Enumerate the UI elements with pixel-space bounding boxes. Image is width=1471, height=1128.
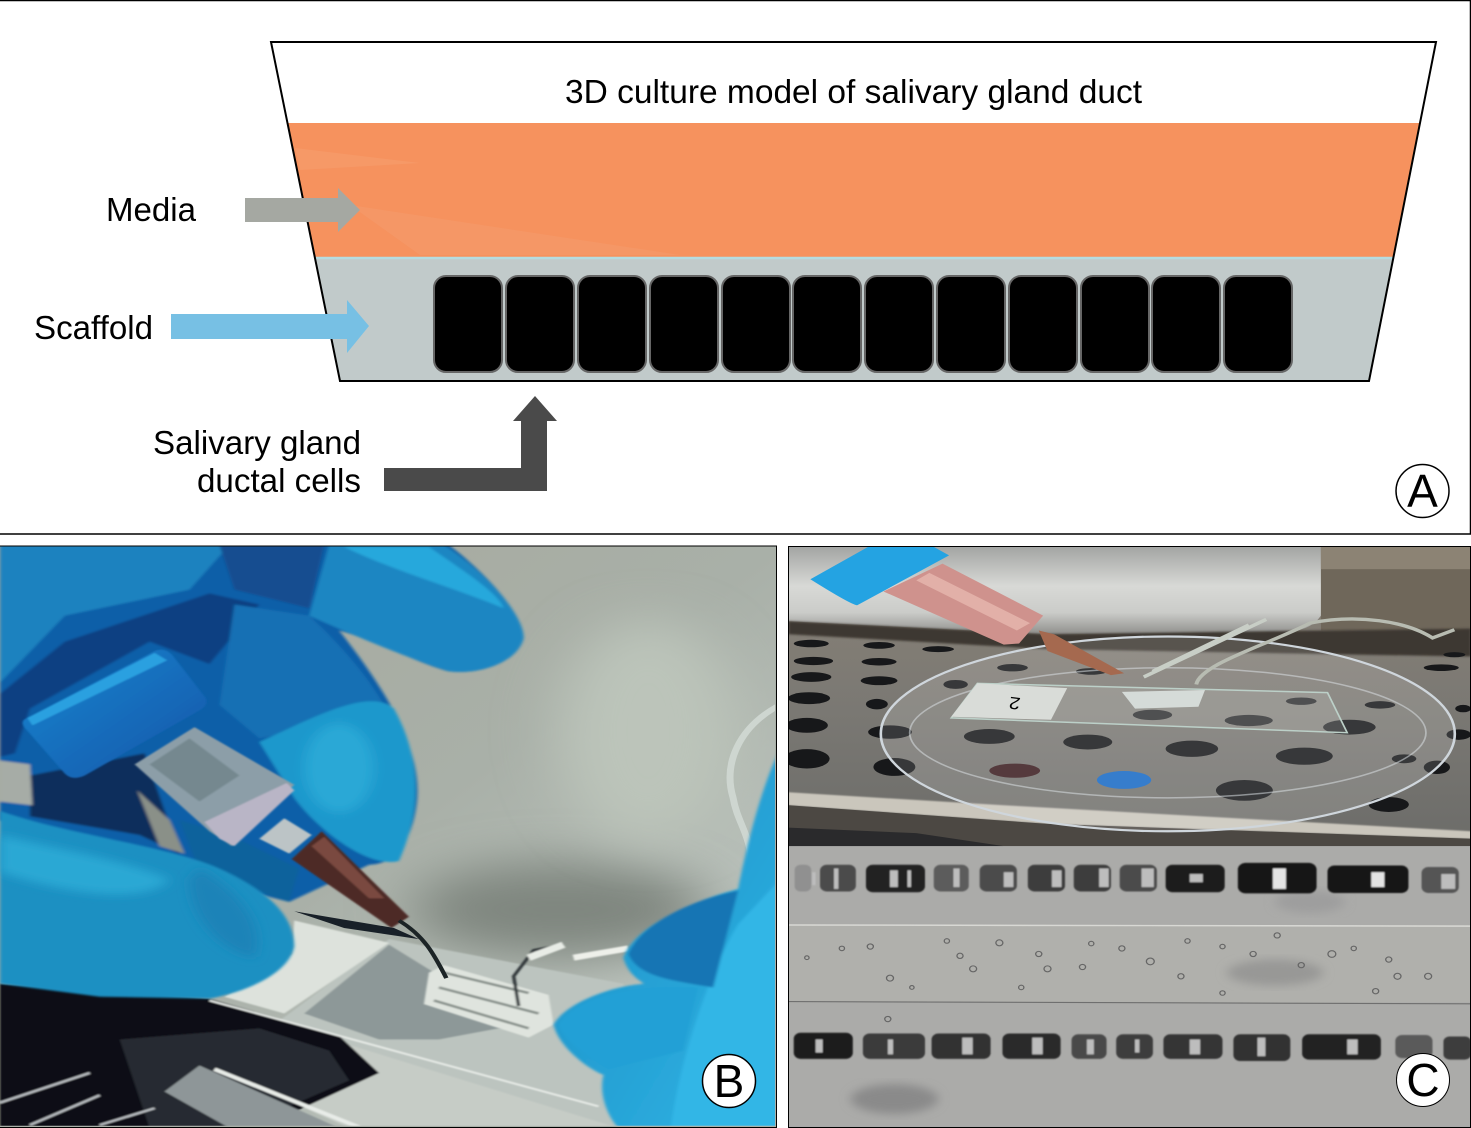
tray front edge [788, 792, 1471, 839]
panel C: culture setup photo and microscope image [784, 546, 1471, 1128]
panel letter C: C [1406, 1054, 1440, 1106]
microfluidic chip [424, 945, 628, 1038]
tray holes [784, 640, 1471, 812]
panel letter A [1396, 464, 1449, 518]
arrow: ductal cells [384, 396, 557, 491]
central channel with cultured cells [805, 933, 1432, 1022]
syringe cap [810, 547, 949, 605]
petri dish [881, 636, 1455, 831]
syringe nozzle [1039, 631, 1124, 675]
bottom row of ductal micropillars [794, 1033, 1471, 1061]
arrow: media [245, 188, 360, 232]
label: Media: Media [106, 191, 197, 228]
syringe barrel [883, 564, 1043, 645]
glass slide with label [951, 683, 1347, 733]
microfluidic chip [1122, 690, 1205, 709]
label: Salivary gland ductal cells: ductal cells [197, 462, 361, 499]
left thumb [0, 811, 294, 999]
panel letter C [1396, 1054, 1450, 1106]
syringe nozzle [259, 818, 312, 854]
patterned backdrop [1321, 547, 1471, 631]
needle hub [292, 831, 409, 928]
syringe [810, 547, 1124, 675]
panel letter B: B [714, 1055, 744, 1107]
media layer [288, 123, 1420, 257]
label: Salivary gland ductal cells: Salivary gland [153, 424, 361, 461]
needle [399, 921, 446, 978]
title: 3D culture model of salivary gland duct [565, 73, 1142, 110]
syringe [23, 650, 409, 928]
panel letter A: A [1407, 465, 1438, 517]
blue hole [1097, 771, 1151, 789]
top row of ductal micropillars [795, 863, 1459, 893]
photo: petri dish on perforated tray: 2 [1008, 693, 1022, 714]
label: Salivary gland ductal cells [153, 424, 361, 499]
panel A: schematic of the 3D culture model [0, 0, 1470, 534]
salivary gland ductal cells row [434, 276, 1292, 372]
steel background [301, 698, 775, 1126]
steel surface and chip [0, 921, 648, 1128]
left glove [0, 545, 524, 902]
microscope image of ductal channel [788, 846, 1471, 1127]
syringe barrel [135, 727, 294, 846]
right glove [554, 749, 780, 1128]
tubing [726, 704, 775, 851]
arrow: scaffold [171, 300, 369, 353]
syringe cap [23, 650, 207, 778]
label: Scaffold: Scaffold [34, 309, 153, 346]
photo: petri dish on perforated tray [784, 547, 1471, 846]
panel B: photo of hands injecting cells with a syringe [0, 545, 780, 1128]
incubator cylinder [788, 547, 1321, 634]
scaffold layer [315, 257, 1393, 381]
panel letter B [702, 1054, 756, 1108]
tubing [1144, 619, 1266, 677]
culture chamber outline [271, 42, 1436, 381]
